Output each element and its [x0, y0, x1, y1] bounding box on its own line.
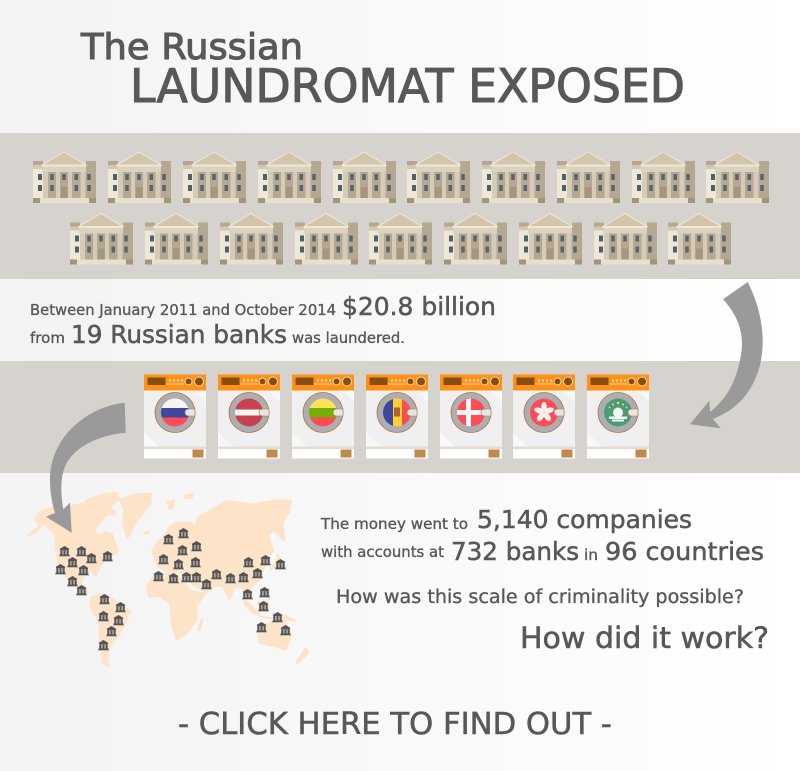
- title: The Russian: [80, 27, 303, 68]
- question text: How was this scale of criminality possible?: [336, 587, 744, 608]
- title: [80, 27, 685, 113]
- text block: where the money went: in: [584, 546, 598, 564]
- text block: amount laundered: from: [30, 329, 65, 347]
- world map: [29, 493, 309, 666]
- title: LAUNDROMAT EXPOSED: [130, 59, 685, 113]
- washer: Denmark: [440, 374, 502, 458]
- text block: amount laundered: [30, 292, 496, 349]
- text block: where the money went: [320, 505, 764, 566]
- washer: Russia: [144, 374, 206, 458]
- text block: amount laundered: Between January 2011 and October 2014: [30, 301, 336, 319]
- call to action: - CLICK HERE TO FIND OUT -: [178, 707, 612, 742]
- washer: Hong Kong: [513, 374, 575, 458]
- washer: Moldova: [366, 374, 428, 458]
- text block: where the money went: The money went to: [320, 515, 468, 533]
- text block: where the money went: 96 countries: [605, 537, 764, 566]
- washer: Latvia: [218, 374, 280, 458]
- panel: band of washing machines: [0, 361, 800, 473]
- arrow: washers to world map: [46, 403, 126, 533]
- text block: where the money went: 732 banks: [451, 537, 579, 566]
- text block: amount laundered: 19 Russian banks: [71, 320, 287, 349]
- washer: Lithuania: [292, 374, 354, 458]
- bank markers on map: [55, 528, 291, 651]
- text block: amount laundered: was laundered.: [292, 329, 405, 347]
- arrow: banks to washers: [690, 282, 763, 428]
- text block: where the money went: with accounts at: [321, 543, 444, 561]
- text block: where the money went: 5,140 companies: [477, 505, 692, 534]
- washer: Macau: [587, 374, 649, 458]
- text block: amount laundered: $20.8 billion: [342, 292, 496, 321]
- question heading: How did it work?: [520, 621, 769, 655]
- panel: band of 19 Russian banks: [0, 133, 800, 279]
